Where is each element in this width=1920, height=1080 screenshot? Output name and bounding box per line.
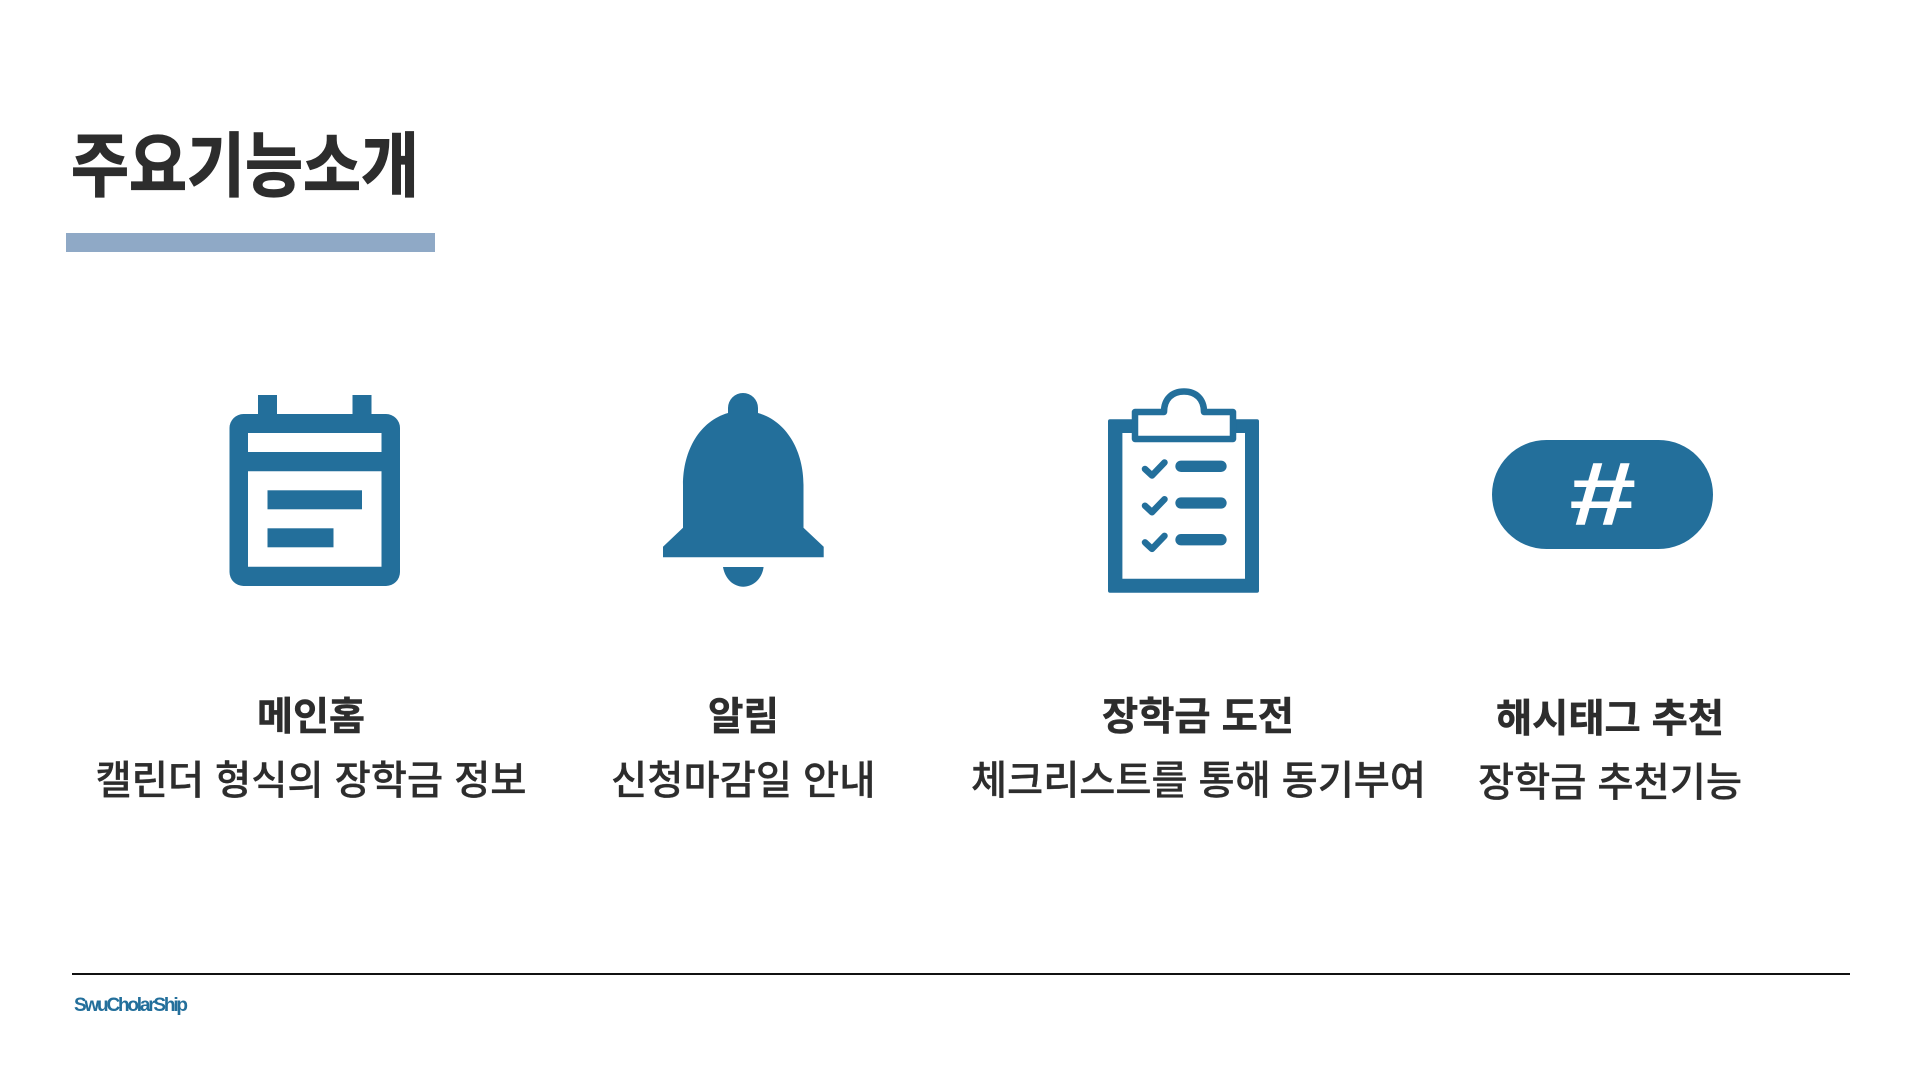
footer rule <box>72 973 1850 975</box>
icon: hashtag pill: # <box>1568 445 1634 545</box>
heading: notifications: 알림 <box>708 696 779 739</box>
icon: calendar <box>230 395 400 586</box>
description: scholarship challenge: 체크리스트를 통해 동기부여 <box>971 759 1426 803</box>
footer brand text: SwuCholarShip <box>74 995 188 1016</box>
title underline bar <box>66 233 435 252</box>
description: notifications: 신청마감일 안내 <box>611 759 876 803</box>
icon: clipboard checklist <box>1108 392 1259 593</box>
panel: scholarship challenge <box>971 392 1426 803</box>
title: 주요기능소개 <box>71 128 419 206</box>
heading: main home: 메인홈 <box>257 696 365 739</box>
icon: bell <box>663 393 824 587</box>
panel: notifications <box>611 393 876 803</box>
description: hashtag recommendation: 장학금 추천기능 <box>1478 761 1742 805</box>
description: main home: 캘린더 형식의 장학금 정보 <box>96 759 526 803</box>
heading: scholarship challenge: 장학금 도전 <box>1102 696 1294 739</box>
panel: hashtag recommendation <box>1478 440 1742 805</box>
panel: main home <box>96 395 526 803</box>
heading: hashtag recommendation: 해시태그 추천 <box>1496 698 1724 741</box>
icon: hashtag pill <box>1492 440 1713 549</box>
